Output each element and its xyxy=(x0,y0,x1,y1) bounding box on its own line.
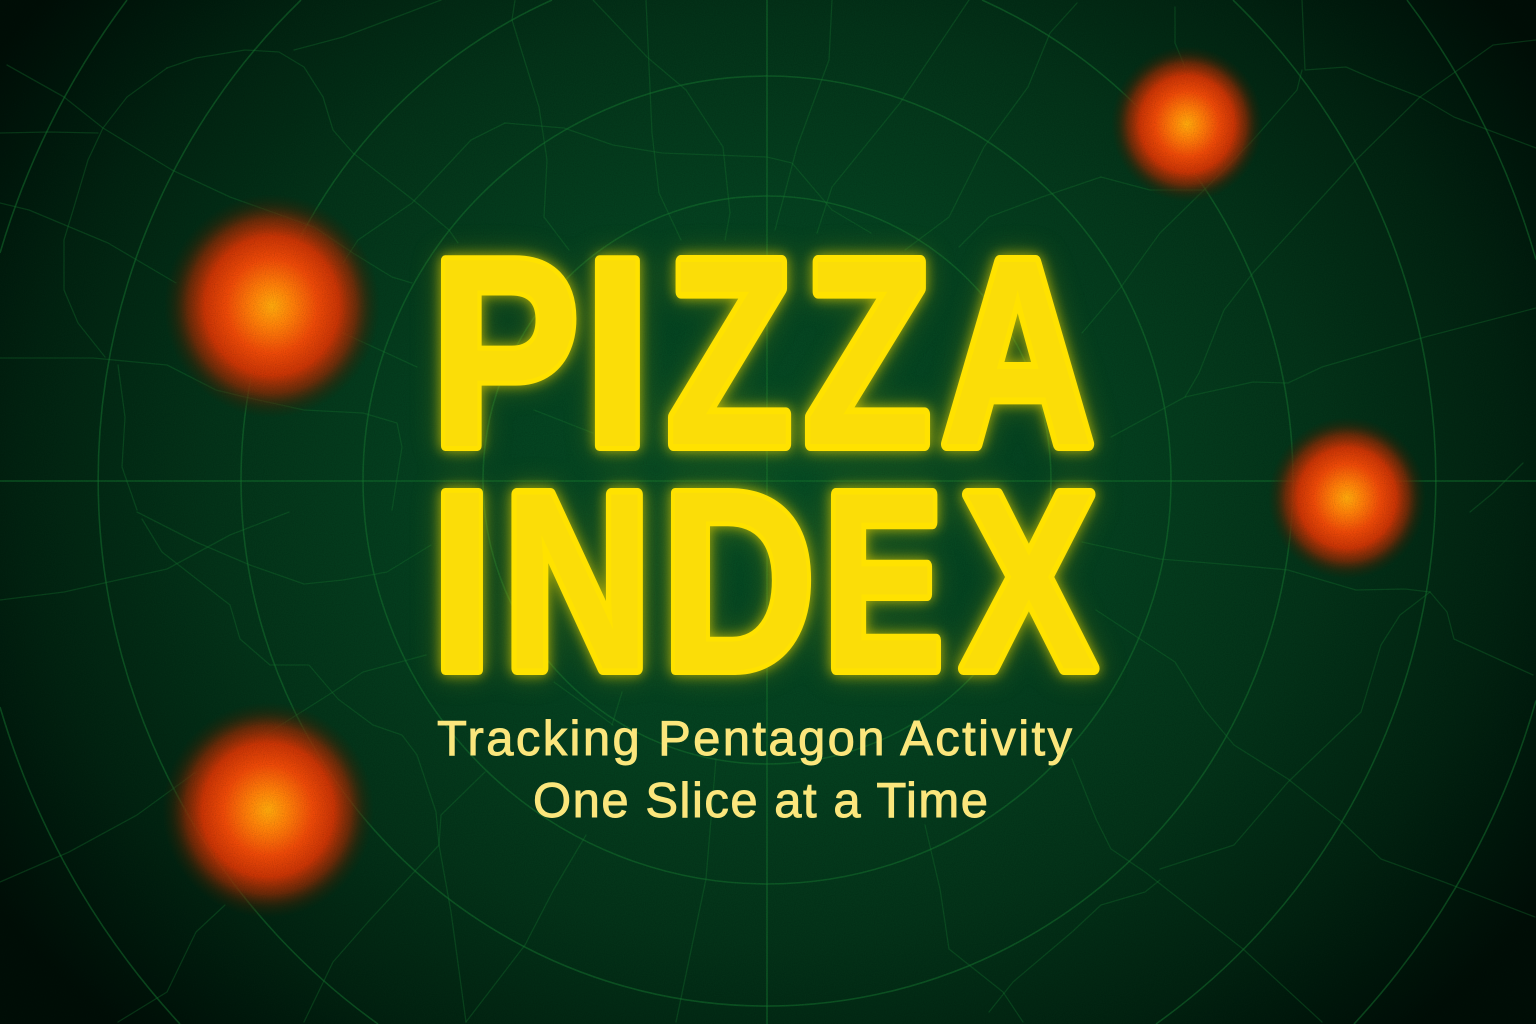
word: INDEX: I xyxy=(430,437,494,725)
word: PIZZA xyxy=(430,201,1094,504)
word: PIZZA: Z xyxy=(804,206,931,501)
title: PIZZA INDEX xyxy=(430,201,1096,726)
word: INDEX: D xyxy=(661,438,816,726)
word: INDEX: E xyxy=(824,441,943,723)
word: INDEX: X xyxy=(961,441,1096,723)
word: INDEX xyxy=(430,437,1096,726)
hotspot: upper right xyxy=(1111,46,1263,202)
word: PIZZA: P xyxy=(430,201,580,504)
hotspot: middle right xyxy=(1268,417,1426,579)
hotspot: lower left xyxy=(162,702,374,918)
word: PIZZA: Z xyxy=(667,205,792,501)
word: PIZZA: I xyxy=(583,201,652,503)
subtitle xyxy=(437,712,1072,828)
word: INDEX: N xyxy=(503,440,651,722)
subtitle line 2: One Slice at a Time xyxy=(533,774,988,828)
subtitle line 1: Tracking Pentagon Activity xyxy=(437,712,1072,766)
word: PIZZA: A xyxy=(941,204,1094,500)
hotspot: upper left xyxy=(164,194,380,418)
